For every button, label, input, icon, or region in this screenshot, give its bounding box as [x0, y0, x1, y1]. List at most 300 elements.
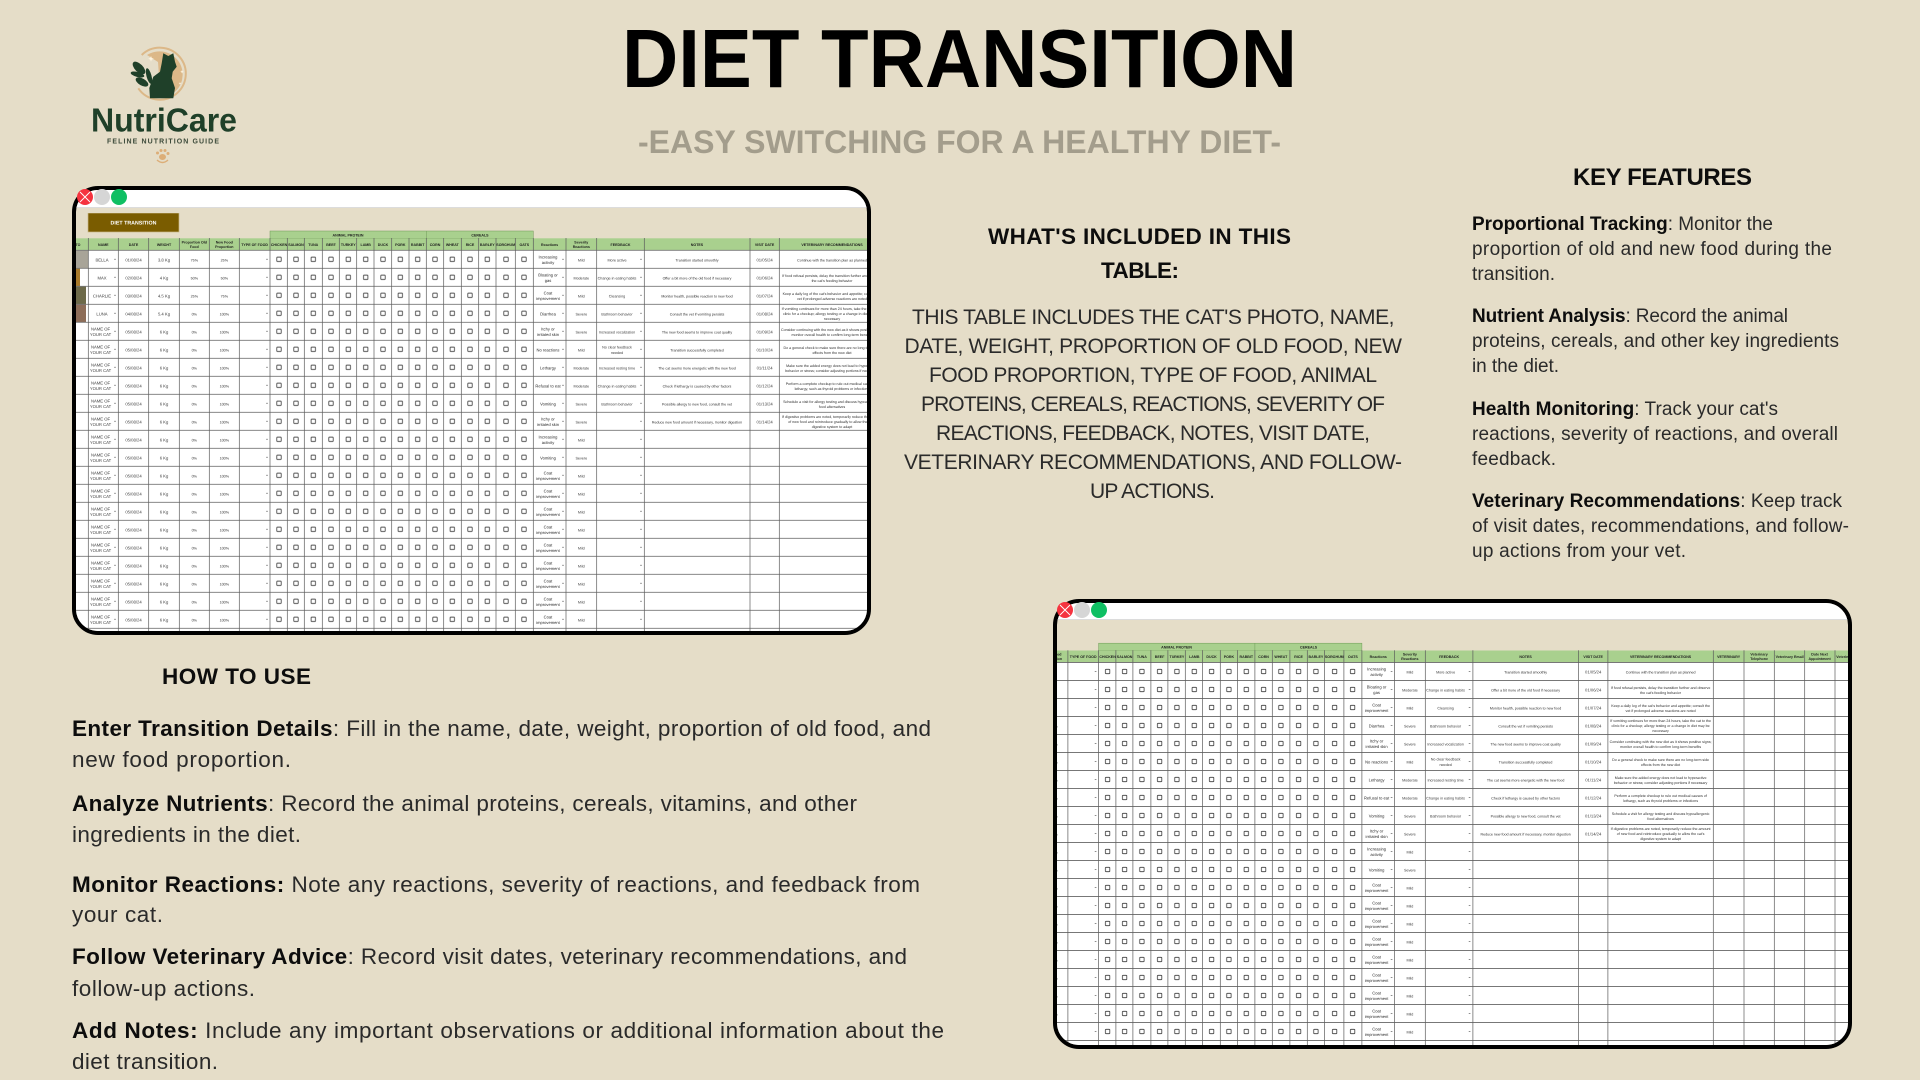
- column: weights: 6 Kg: [160, 564, 169, 568]
- column headers: NAME: [98, 243, 109, 247]
- column: notes: Reduce new food amount if necessary, monitor digestion: [652, 420, 742, 424]
- column: new food proportion: 100%: [220, 420, 230, 424]
- column: names: NAME OF: [91, 434, 110, 439]
- column: old food proportion: 0%: [192, 600, 198, 604]
- column: notes: The new food seems to improve coat quality: [662, 330, 732, 334]
- column: dates: 05/08/24: [125, 474, 142, 478]
- column: names: NAME OF: [91, 614, 110, 619]
- column: severity: Severe: [575, 330, 587, 334]
- column headers: TUNA: [308, 243, 319, 247]
- column: notes: Offer a bit more of the old food if necessary: [663, 276, 732, 280]
- column: feedback: Bathroom behavior: [601, 312, 633, 316]
- column: reactions: Increasing: [539, 254, 558, 259]
- column: visit dates: 01/12/24: [756, 384, 773, 388]
- group headers: CEREALS: [471, 234, 489, 238]
- column headers: WHEAT: [446, 243, 460, 247]
- column: names: YOUR CAT: [90, 620, 112, 625]
- column: old food proportion: 0%: [192, 528, 198, 532]
- group headers: [270, 231, 533, 238]
- column: old food proportion: 0%: [192, 510, 198, 514]
- column: reactions: improvement: [536, 296, 561, 301]
- column: veterinary recommendations: vet if prolonged adverse reactions are noted: [797, 297, 867, 301]
- column: weights: 4 Kg: [160, 276, 169, 280]
- spreadsheet table scrolled right: [1057, 642, 1848, 1045]
- column headers: CORN: [430, 243, 441, 247]
- column: names: NAME OF: [91, 596, 110, 601]
- column: old food proportion: 0%: [192, 366, 198, 370]
- step: enter transition details: [72, 716, 931, 772]
- step: follow veterinary advice: [72, 944, 907, 1001]
- column: visit dates: 01/13/24: [756, 402, 773, 406]
- column: new food proportion: 100%: [220, 618, 230, 622]
- panel: key features: [1472, 164, 1849, 562]
- column: new food proportion: 25%: [221, 258, 229, 262]
- panel: spreadsheet window right: [1053, 599, 1852, 1049]
- title: DIET TRANSITION: [622, 12, 1297, 105]
- column: new food proportion: 100%: [220, 438, 230, 442]
- text block: what's included description: FOOD PROPORTION, TYPE OF FOOD, ANIMAL: [929, 364, 1377, 387]
- column: notes: Possible allergy to new food, consult the vet: [662, 402, 732, 406]
- column headers: BEEF: [326, 243, 337, 247]
- column: names: YOUR CAT: [90, 368, 112, 373]
- logo: ring: [138, 48, 186, 100]
- column: reactions: improvement: [536, 548, 561, 553]
- column: visit dates: 01/07/24: [756, 294, 773, 298]
- column: names: YOUR CAT: [90, 584, 112, 589]
- column: reactions: Coat: [544, 524, 553, 529]
- column: visit dates: 01/14/24: [756, 420, 773, 424]
- column: severity: Mild: [578, 564, 585, 568]
- column: reactions: Coat: [544, 488, 553, 493]
- heading: key features: KEY FEATURES: [1573, 164, 1752, 191]
- column: severity: Mild: [578, 438, 585, 442]
- column: names: NAME OF: [91, 470, 110, 475]
- step: add notes: diet transition.: [72, 1049, 218, 1074]
- column: names: NAME OF: [91, 362, 110, 367]
- text block: what's included description: [904, 306, 1402, 503]
- step: follow veterinary advice: Follow Veterinary Advice: Record visit dates, veterinary recommendations, and: [72, 944, 907, 969]
- feature: proportional tracking: Proportional Tracking: Monitor the: [1472, 214, 1773, 235]
- column: names: NAME OF: [91, 560, 110, 565]
- column: names: NAME OF: [91, 578, 110, 583]
- column: notes: The cat seems more energetic with the new food: [658, 366, 736, 370]
- column headers: Reactions: [573, 245, 590, 249]
- column: reactions: Coat: [544, 290, 553, 295]
- column: old food proportion: 0%: [192, 438, 198, 442]
- column: new food proportion: 100%: [220, 564, 230, 568]
- logo: NutriCare: [91, 48, 237, 163]
- column: new food proportion: 100%: [220, 492, 230, 496]
- feature: health monitoring: [1472, 399, 1838, 470]
- column: reactions: irritated skin: [537, 332, 560, 337]
- column: reactions: improvement: [536, 620, 561, 625]
- column headers: DATE: [129, 243, 139, 247]
- column: dates: 05/08/24: [125, 348, 142, 352]
- heading: how to use: HOW TO USE: [162, 664, 311, 689]
- column: old food proportion: 25%: [191, 294, 199, 298]
- column: old food proportion: 0%: [192, 402, 198, 406]
- column: names: NAME OF: [91, 326, 110, 331]
- column: reactions: improvement: [536, 530, 561, 535]
- feature: nutrient analysis: in the diet.: [1472, 356, 1559, 377]
- column: names: LUNA: [96, 312, 108, 316]
- column: weights: 5.4 Kg: [158, 312, 171, 316]
- column: weights: 6 Kg: [160, 384, 169, 388]
- column: reactions: activity: [542, 440, 555, 445]
- column: feedback: needed: [611, 351, 623, 355]
- column: severity: Moderate: [574, 366, 589, 370]
- column: notes: Transition successfully completed: [670, 348, 724, 352]
- column: names: YOUR CAT: [90, 602, 112, 607]
- column headers: BARLEY: [480, 243, 495, 247]
- column: old food proportion: 0%: [192, 312, 198, 316]
- column: weights: 6 Kg: [160, 366, 169, 370]
- logo: moon disc: [147, 51, 183, 94]
- column headers: CHICKEN: [271, 243, 288, 247]
- column: dates: 05/08/24: [125, 438, 142, 442]
- column headers: Proportion Old: [182, 240, 207, 244]
- column: names: YOUR CAT: [90, 476, 112, 481]
- column: new food proportion: 100%: [220, 528, 230, 532]
- column: reactions: activity: [542, 260, 555, 265]
- column lines: [88, 238, 1006, 640]
- minimize button: [94, 189, 110, 205]
- text block: what's included description: REACTIONS, FEEDBACK, NOTES, VISIT DATE,: [936, 422, 1370, 445]
- column: reactions: Coat: [544, 470, 553, 475]
- column headers: RICE: [466, 243, 475, 247]
- column: feedback: Increased vocalization: [599, 330, 635, 334]
- column: weights: 6 Kg: [160, 618, 169, 622]
- column: names: YOUR CAT: [90, 422, 112, 427]
- column: visit dates: 01/10/24: [756, 348, 773, 352]
- column: new food proportion: 100%: [220, 348, 230, 352]
- column: severity: Severe: [575, 402, 587, 406]
- column: weights: 6 Kg: [160, 456, 169, 460]
- column: severity: Severe: [575, 456, 587, 460]
- column: names: YOUR CAT: [90, 566, 112, 571]
- logo: leaves: [130, 60, 153, 89]
- title bar: [76, 190, 867, 208]
- column: feedback: Increased resting time: [599, 366, 635, 370]
- feature: health monitoring: reactions, severity of reactions, and overall: [1472, 424, 1838, 445]
- column: weights: 6 Kg: [160, 402, 169, 406]
- feature: nutrient analysis: proteins, cereals, and other key ingredients: [1472, 331, 1839, 352]
- step: analyze nutrients: ingredients in the diet.: [72, 822, 301, 847]
- column: severity: Mild: [578, 492, 585, 496]
- window controls right: [1057, 602, 1107, 618]
- column: new food proportion: 100%: [220, 600, 230, 604]
- close button: [1057, 602, 1073, 618]
- column: notes: Transition started smoothly: [675, 258, 719, 262]
- column: weights: 6 Kg: [160, 348, 169, 352]
- column: dates: 05/08/24: [125, 456, 142, 460]
- window controls left: [77, 189, 127, 205]
- step: follow veterinary advice: follow-up actions.: [72, 976, 255, 1001]
- column: names: YOUR CAT: [90, 332, 112, 337]
- column: weights: 6 Kg: [160, 510, 169, 514]
- column headers: Proportion: [215, 245, 233, 249]
- panel: how to use: [72, 664, 944, 1074]
- cat photos: [75, 250, 88, 322]
- group headers: ANIMAL PROTEIN: [333, 234, 364, 238]
- column: old food proportion: 0%: [192, 456, 198, 460]
- column headers: PORK: [395, 243, 406, 247]
- column: reactions: improvement: [536, 494, 561, 499]
- column: veterinary recommendations: necessary: [824, 317, 840, 321]
- column: names: NAME OF: [91, 398, 110, 403]
- column: old food proportion: 0%: [192, 492, 198, 496]
- column: new food proportion: 100%: [220, 582, 230, 586]
- step: add notes: [72, 1018, 944, 1074]
- column: veterinary recommendations: effects from the new diet: [812, 351, 852, 355]
- column: feedback: Bathroom behavior: [601, 402, 633, 406]
- maximize button: [1091, 602, 1107, 618]
- column: old food proportion: 0%: [192, 546, 198, 550]
- feature: veterinary recommendations: of visit dates, recommendations, and follow-: [1472, 516, 1849, 537]
- column: feedback: Cleansing: [609, 294, 625, 298]
- column: reactions: Coat: [544, 596, 553, 601]
- column: dates: 05/08/24: [125, 366, 142, 370]
- column: names: NAME OF: [91, 488, 110, 493]
- feature: proportional tracking: transition.: [1472, 264, 1555, 285]
- text block: what's included description: DATE, WEIGHT, PROPORTION OF OLD FOOD, NEW: [904, 335, 1402, 358]
- column: severity: Severe: [575, 420, 587, 424]
- text block: what's included description: THIS TABLE INCLUDES THE CAT'S PHOTO, NAME,: [912, 306, 1394, 329]
- column: names: NAME OF: [91, 452, 110, 457]
- column: dates: 05/08/24: [125, 618, 142, 622]
- column: dates: 02/08/24: [125, 276, 142, 280]
- text block: what's included description: UP ACTIONS.: [1090, 480, 1215, 503]
- column: old food proportion: 0%: [192, 420, 198, 424]
- column: names: MAX: [97, 276, 107, 280]
- column: veterinary recommendations: food alternatives: [819, 405, 845, 409]
- column: feedback: Change in eating habits: [598, 276, 637, 280]
- column: names: YOUR CAT: [90, 440, 112, 445]
- column: old food proportion: 0%: [192, 474, 198, 478]
- column: visit dates: 01/09/24: [756, 330, 773, 334]
- column: severity: Mild: [578, 474, 585, 478]
- column: severity: Mild: [578, 600, 585, 604]
- column: dates: 05/08/24: [125, 564, 142, 568]
- header band and table body: [60, 238, 1040, 640]
- column headers: VETERINARY RECOMMENDATIONS: [801, 243, 863, 247]
- column: old food proportion: 0%: [192, 582, 198, 586]
- column: dates: 05/08/24: [125, 420, 142, 424]
- column headers: New Food: [216, 240, 233, 244]
- step: enter transition details: new food proportion.: [72, 747, 291, 772]
- feature: proportional tracking: [1472, 214, 1832, 285]
- column: reactions: Coat: [544, 506, 553, 511]
- column: names: NAME OF: [91, 542, 110, 547]
- dropdown ticks: [114, 250, 642, 628]
- step: enter transition details: Enter Transition Details: Fill in the name, date, weight, proportion of old food, and: [72, 716, 931, 741]
- column: dates: 01/08/24: [125, 258, 142, 262]
- column: dates: 05/08/24: [125, 384, 142, 388]
- column: reactions: irritated skin: [537, 422, 560, 427]
- brown title button: DIET TRANSITION: [111, 220, 157, 226]
- column: names: BELLA: [95, 258, 109, 262]
- column: old food proportion: 0%: [192, 564, 198, 568]
- column: dates: 03/08/24: [125, 294, 142, 298]
- column: names: YOUR CAT: [90, 548, 112, 553]
- column: reactions: Increasing: [539, 434, 558, 439]
- heading: what's included: WHAT'S INCLUDED IN THIS: [988, 224, 1291, 249]
- column: notes: Consult the vet if vomiting persists: [670, 312, 724, 316]
- column headers: RABBIT: [411, 243, 425, 247]
- column headers: NOTES: [691, 243, 704, 247]
- column: dates: 05/08/24: [125, 546, 142, 550]
- heading: what's included: [988, 224, 1291, 283]
- column: dates: 05/08/24: [125, 600, 142, 604]
- column: reactions: No reactions: [537, 348, 559, 352]
- step: analyze nutrients: [72, 791, 858, 847]
- column headers: FEEDBACK: [611, 243, 631, 247]
- column: severity: Mild: [578, 348, 585, 352]
- column: weights: 6 Kg: [160, 420, 169, 424]
- column: reactions: improvement: [536, 602, 561, 607]
- panel: what's included: [904, 224, 1402, 503]
- feature: veterinary recommendations: up actions from your vet.: [1472, 541, 1686, 562]
- column: old food proportion: 0%: [192, 330, 198, 334]
- column: visit dates: 01/06/24: [756, 276, 773, 280]
- column: weights: 6 Kg: [160, 600, 169, 604]
- column: weights: 6 Kg: [160, 330, 169, 334]
- grid lines: [60, 250, 1040, 628]
- column: reactions: Coat: [544, 614, 553, 619]
- column: new food proportion: 100%: [220, 510, 230, 514]
- heading: what's included: TABLE:: [1101, 258, 1179, 283]
- column: names: YOUR CAT: [90, 350, 112, 355]
- column: new food proportion: 100%: [220, 474, 230, 478]
- column: names: NAME OF: [91, 506, 110, 511]
- column: reactions: Itchy or: [541, 416, 555, 421]
- column: names: YOUR CAT: [90, 530, 112, 535]
- column: reactions: Bloating or: [538, 272, 558, 277]
- column: reactions: Vomiting: [540, 456, 557, 460]
- column: severity: Mild: [578, 258, 585, 262]
- step: add notes: Add Notes: Include any important observations or additional information about the: [72, 1018, 944, 1043]
- column: notes: Monitor health, possible reaction to new food: [661, 294, 733, 298]
- column: veterinary recommendations: digestive system to adapt: [812, 425, 852, 429]
- column: reactions: Refusal to eat: [535, 384, 561, 388]
- column: veterinary recommendations: the cat's feeding behavior: [812, 279, 853, 283]
- column: feedback: More active: [607, 258, 627, 262]
- column: old food proportion: 0%: [192, 348, 198, 352]
- column: new food proportion: 75%: [221, 294, 229, 298]
- column: severity: Mild: [578, 294, 585, 298]
- text block: what's included description: VETERINARY RECOMMENDATIONS, AND FOLLOW-: [904, 451, 1402, 474]
- column: reactions: Diarrhea: [540, 312, 557, 316]
- column: old food proportion: 0%: [192, 618, 198, 622]
- column: names: YOUR CAT: [90, 512, 112, 517]
- column: dates: 05/08/24: [125, 510, 142, 514]
- column: new food proportion: 100%: [220, 456, 230, 460]
- column headers: SORGHUM: [496, 243, 515, 247]
- column: new food proportion: 100%: [220, 330, 230, 334]
- column: reactions: Coat: [544, 578, 553, 583]
- column: new food proportion: 100%: [220, 366, 230, 370]
- column: severity: Mild: [578, 582, 585, 586]
- step: monitor reactions: Monitor Reactions: Note any reactions, severity of reactions, and feedback from: [72, 872, 920, 897]
- column headers: TYPE OF FOOD: [241, 243, 268, 247]
- feature: veterinary recommendations: Veterinary Recommendations: Keep track: [1472, 491, 1842, 512]
- column headers: DUCK: [378, 243, 389, 247]
- column: reactions: Coat: [544, 542, 553, 547]
- column: reactions: gas: [545, 278, 551, 283]
- column headers: VISIT DATE: [755, 243, 775, 247]
- column: dates: 05/08/24: [125, 330, 142, 334]
- column: severity: Moderate: [574, 384, 589, 388]
- column: feedback: Change in eating habits: [598, 384, 637, 388]
- column: dates: 05/08/24: [125, 582, 142, 586]
- step: monitor reactions: your cat.: [72, 902, 163, 927]
- column: names: NAME OF: [91, 380, 110, 385]
- column: weights: 4.5 Kg: [158, 294, 171, 298]
- column: old food proportion: 75%: [191, 258, 199, 262]
- column: feedback: No clear feedback: [602, 345, 632, 349]
- column headers: [76, 240, 1028, 249]
- feature: proportional tracking: proportion of old and new food during the: [1472, 239, 1832, 260]
- step: monitor reactions: [72, 872, 920, 927]
- subtitle: -EASY SWITCHING FOR A HEALTHY DIET-: [638, 124, 1281, 160]
- maximize button: [111, 189, 127, 205]
- column: weights: 6 Kg: [160, 528, 169, 532]
- column: dates: 05/08/24: [125, 528, 142, 532]
- column: notes: Check if lethargy is caused by other factors: [663, 384, 732, 388]
- column: names: CHARLIE: [93, 294, 111, 298]
- panel: spreadsheet window left: [72, 186, 871, 635]
- column: new food proportion: 100%: [220, 402, 230, 406]
- column: reactions: Coat: [544, 560, 553, 565]
- column: new food proportion: 50%: [221, 276, 229, 280]
- text block: what's included description: PROTEINS, CEREALS, REACTIONS, SEVERITY OF: [921, 393, 1385, 416]
- column: names: NAME OF: [91, 344, 110, 349]
- column: severity: Mild: [578, 510, 585, 514]
- column headers: Severity: [574, 240, 588, 244]
- column: severity: Mild: [578, 546, 585, 550]
- title bar: [1057, 603, 1848, 620]
- column headers: Food: [190, 245, 199, 249]
- column: weights: 6 Kg: [160, 438, 169, 442]
- column: reactions: Lethargy: [540, 366, 557, 370]
- column: reactions: improvement: [536, 566, 561, 571]
- column headers: OATS: [519, 243, 530, 247]
- column: weights: 6 Kg: [160, 492, 169, 496]
- column: new food proportion: 100%: [220, 312, 230, 316]
- column headers: SALMON: [288, 243, 304, 247]
- column: weights: 6 Kg: [160, 474, 169, 478]
- column: names: YOUR CAT: [90, 404, 112, 409]
- spreadsheet table: [76, 213, 867, 631]
- column: dates: 05/08/24: [125, 402, 142, 406]
- column: weights: 6 Kg: [160, 582, 169, 586]
- column: old food proportion: 0%: [192, 384, 198, 388]
- column: names: YOUR CAT: [90, 386, 112, 391]
- feature: nutrient analysis: [1472, 306, 1839, 377]
- column: severity: Mild: [578, 618, 585, 622]
- column: severity: Mild: [578, 528, 585, 532]
- column: names: YOUR CAT: [90, 494, 112, 499]
- column: new food proportion: 100%: [220, 546, 230, 550]
- column: dates: 04/08/24: [125, 312, 142, 316]
- column: weights: 3.8 Kg: [158, 258, 171, 262]
- column: names: YOUR CAT: [90, 458, 112, 463]
- logo: wordmark: NutriCare: [91, 103, 237, 140]
- column: dates: 05/08/24: [125, 492, 142, 496]
- column: reactions: improvement: [536, 512, 561, 517]
- column: severity: Moderate: [574, 276, 589, 280]
- column: names: NAME OF: [91, 416, 110, 421]
